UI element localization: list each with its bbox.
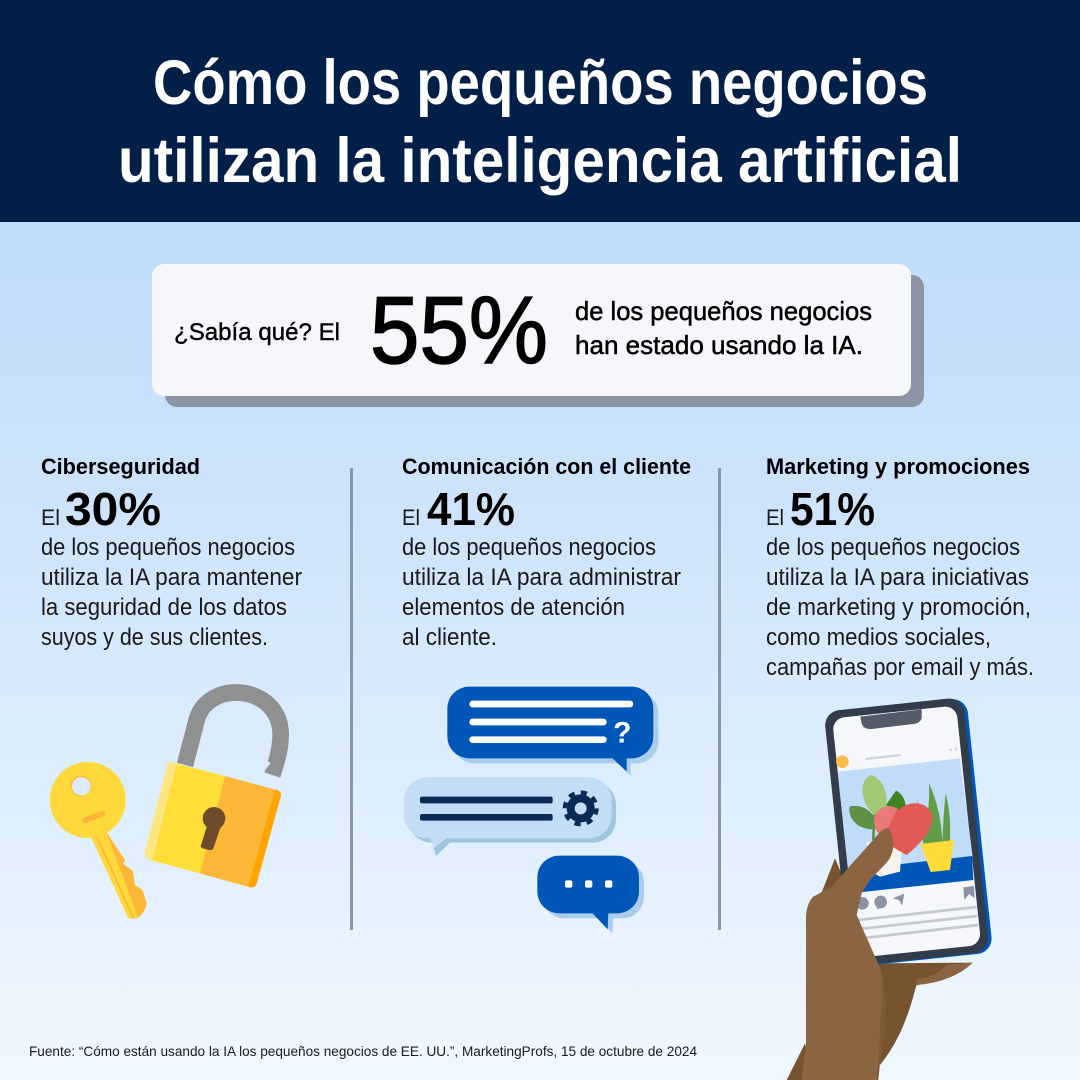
- source note: Fuente: “Cómo están usando la IA los pequeños negocios de EE. UU.”, MarketingProfs, 15 de octubre de 2024: [29, 1043, 697, 1059]
- title: [118, 48, 962, 196]
- panel: comunicación text: utiliza la IA para administrar: [402, 564, 681, 591]
- panel: 55% stat card: han estado usando la IA.: [575, 330, 863, 360]
- bubble with dots: [537, 856, 644, 933]
- panel: comunicación text: [402, 454, 691, 651]
- back of hand: [820, 858, 973, 1065]
- bubble with gear: [404, 777, 616, 856]
- title: Cómo los pequeños negocios: [153, 48, 928, 118]
- panel: comunicación text: elementos de atención: [402, 594, 625, 621]
- icon: chat bubbles: [404, 687, 658, 933]
- panel: comunicación text: Comunicación con el cliente: [402, 454, 691, 479]
- panel: marketing text: Marketing y promociones: [766, 454, 1030, 479]
- panel: 55% stat card: [152, 264, 924, 407]
- panel: marketing text: El: [766, 505, 784, 530]
- panel: marketing text: campañas por email y más.: [766, 654, 1034, 681]
- phone: [824, 697, 993, 967]
- divider 2: [718, 468, 721, 930]
- panel: marketing text: [766, 454, 1034, 681]
- panel: marketing text: utiliza la IA para iniciativas: [766, 564, 1029, 591]
- panel: marketing text: de marketing y promoción,: [766, 594, 1031, 621]
- panel: ciberseguridad text: 30%: [65, 483, 161, 535]
- panel: comunicación text: 41%: [427, 483, 515, 535]
- post image: [838, 758, 973, 870]
- panel: marketing text: 51%: [790, 483, 875, 535]
- panel: ciberseguridad text: Ciberseguridad: [41, 454, 200, 479]
- background: [0, 222, 1080, 1080]
- panel: marketing text: de los pequeños negocios: [766, 534, 1020, 561]
- title: utilizan la inteligencia artificial: [118, 126, 962, 196]
- action icons: [856, 897, 869, 910]
- bubble with question mark: ?: [613, 717, 631, 750]
- panel: ciberseguridad text: El: [41, 505, 60, 530]
- panel: marketing text: como medios sociales,: [766, 624, 991, 651]
- heart: [874, 803, 932, 855]
- header band with title: [0, 0, 1080, 222]
- panel: comunicación text: al cliente.: [402, 624, 497, 651]
- plant and pots: [873, 810, 874, 840]
- panel: ciberseguridad text: la seguridad de los datos: [41, 594, 287, 621]
- divider 1: [350, 468, 353, 930]
- panel: ciberseguridad text: suyos y de sus clientes.: [41, 624, 268, 651]
- icon: padlock and key: [50, 692, 283, 918]
- panel: ciberseguridad text: [41, 454, 302, 651]
- thumb and palm: [802, 828, 893, 1080]
- icon: hand holding phone: [787, 697, 993, 1080]
- big stat: 55%: 55%: [370, 277, 548, 384]
- panel: 55% stat card: de los pequeños negocios: [575, 296, 872, 326]
- panel: ciberseguridad text: utiliza la IA para mantener: [41, 564, 302, 591]
- bubble with question mark: [447, 687, 658, 776]
- panel: 55% stat card: ¿Sabía qué? El: [174, 319, 340, 346]
- panel: ciberseguridad text: de los pequeños negocios: [41, 534, 295, 561]
- panel: comunicación text: de los pequeños negocios: [402, 534, 656, 561]
- panel: comunicación text: El: [402, 505, 420, 530]
